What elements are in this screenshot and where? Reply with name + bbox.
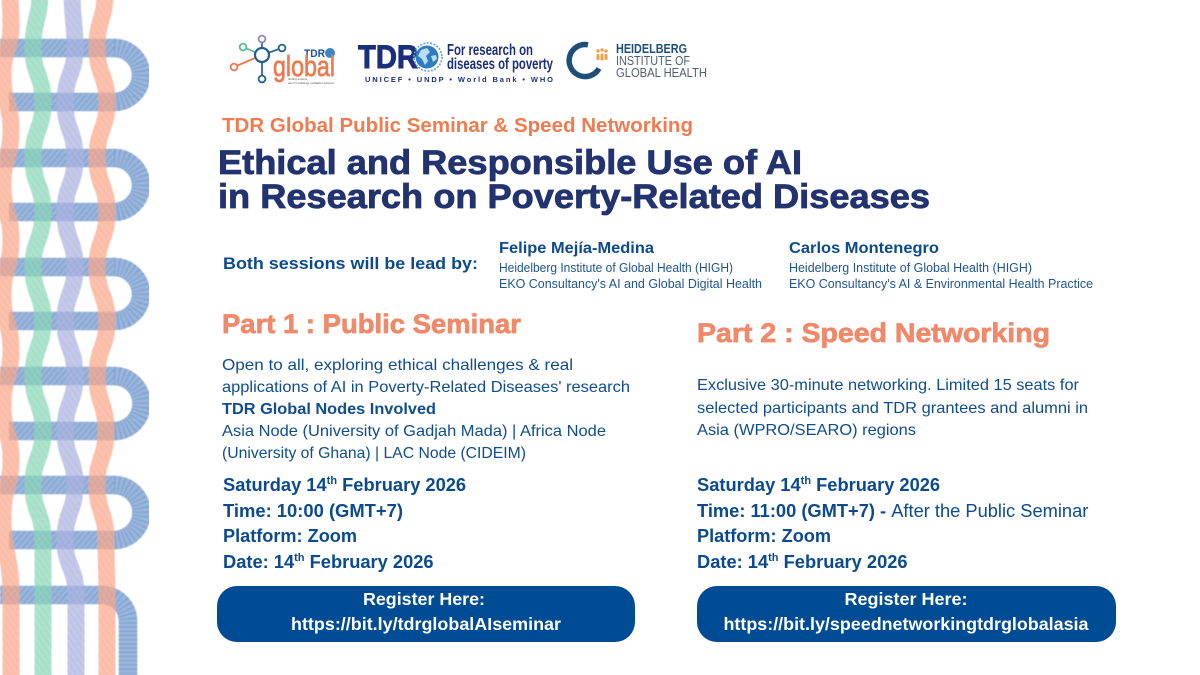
schedule: part 2: February 2026 xyxy=(811,474,940,495)
schedule: part 2: th xyxy=(768,552,779,564)
panel: part 1 public seminar xyxy=(217,309,635,642)
rope: blue loop twist marks xyxy=(102,48,142,675)
rope: green xyxy=(33,0,43,675)
schedule: part 2 xyxy=(697,474,1088,572)
rope: left orange xyxy=(3,0,11,675)
description: part 1: applications of AI in Poverty-Related Diseases' research xyxy=(222,379,630,396)
speaker: Felipe Mejía-Medina: EKO Consultancy's AI and Global Digital Health xyxy=(499,277,762,291)
logo: TDR Global: finding experts xyxy=(288,77,308,81)
description: part 1: Open to all, exploring ethical challenges & real xyxy=(222,357,573,374)
button: register part 1: https://bit.ly/tdrglobalAIseminar xyxy=(291,614,561,634)
logo: Heidelberg Institute of Global Health xyxy=(569,41,707,80)
description: part 1 xyxy=(222,357,630,462)
icon: globe xyxy=(414,43,442,71)
schedule: part 2: Platform: Zoom xyxy=(697,525,831,546)
speaker: Felipe Mejía-Medina xyxy=(499,240,762,291)
logo: TDR for research on diseases of poverty: TDR xyxy=(358,39,418,75)
title xyxy=(218,144,930,216)
speakers intro: Both sessions will be lead by: xyxy=(223,254,478,273)
heading: part 1: Part 1 : Public Seminar xyxy=(222,309,521,339)
description: part 2 xyxy=(697,377,1088,439)
logo: TDR for research on diseases of poverty: For research on xyxy=(447,42,533,59)
schedule: part 1: Time: 10:00 (GMT+7) xyxy=(223,500,403,521)
button: register part 2 xyxy=(697,586,1116,642)
schedule: part 1: February 2026 xyxy=(337,474,466,495)
schedule: part 2: th xyxy=(801,475,811,487)
logo: Heidelberg Institute of Global Health: HEIDELBERG xyxy=(616,41,687,56)
logo: TDR Global xyxy=(231,36,335,85)
title: in Research on Poverty-Related Diseases xyxy=(218,178,930,216)
logo: TDR for research on diseases of poverty xyxy=(358,39,553,84)
button: register part 2: https://bit.ly/speednetworkingtdrglobalasia xyxy=(724,614,1089,634)
schedule: part 2: Time: 11:00 (GMT+7) - After the Public Seminar xyxy=(697,500,1088,521)
panel: part 2 speed networking xyxy=(697,318,1116,642)
heading: part 2: Part 2 : Speed Networking xyxy=(697,318,1050,348)
schedule: part 1: Platform: Zoom xyxy=(223,525,357,546)
speaker: Felipe Mejía-Medina: Felipe Mejía-Medina xyxy=(499,240,654,257)
schedule: part 1: Date: 14 xyxy=(223,551,294,572)
description: part 1: TDR Global Nodes Involved xyxy=(222,401,436,418)
title: Ethical and Responsible Use of AI xyxy=(218,144,802,182)
schedule: part 1: th xyxy=(327,475,337,487)
schedule: part 2: Saturday 14 xyxy=(697,474,801,495)
schedule: part 1: Saturday 14 xyxy=(223,474,327,495)
logo: Heidelberg Institute of Global Health: INSTITUTE OF xyxy=(616,53,690,68)
speaker: Felipe Mejía-Medina: Heidelberg Institute of Global Health (HIGH) xyxy=(499,261,733,275)
speaker: Carlos Montenegro xyxy=(789,240,1093,291)
logo: TDR Global: global xyxy=(273,51,335,83)
logo: TDR Global: and building collaborations xyxy=(288,81,335,85)
speaker: Carlos Montenegro: EKO Consultancy's AI & Environmental Health Practice xyxy=(789,277,1093,291)
logo: TDR for research on diseases of poverty: UNICEF • UNDP • World Bank • WHO xyxy=(365,75,553,84)
schedule: part 1: th xyxy=(294,552,305,564)
subtitle: TDR Global Public Seminar & Speed Networking xyxy=(222,114,693,137)
rope: blue loop turns xyxy=(102,48,142,675)
button: register part 1 xyxy=(217,586,635,642)
schedule: part 2: Date: 14 xyxy=(697,551,768,572)
rope: purple xyxy=(65,0,76,675)
icon: network hub xyxy=(231,36,285,82)
rope: blue horizontal bands xyxy=(0,48,114,595)
schedule: part 1: February 2026 xyxy=(305,551,434,572)
description: part 1: Asia Node (University of Gadjah Mada) | Africa Node xyxy=(222,423,606,440)
woven rope decoration xyxy=(0,0,142,675)
description: part 2: selected participants and TDR grantees and alumni in xyxy=(697,400,1088,417)
description: part 2: Asia (WPRO/SEARO) regions xyxy=(697,422,916,439)
description: part 1: (University of Ghana) | LAC Node (CIDEIM) xyxy=(222,445,526,462)
description: part 2: Exclusive 30-minute networking. Limited 15 seats for xyxy=(697,377,1080,394)
button: register part 1: Register Here: xyxy=(363,589,485,609)
logo: TDR Global: TDR xyxy=(304,48,325,60)
rope: right orange xyxy=(97,0,107,675)
icon: open ring xyxy=(569,45,599,77)
logo: Heidelberg Institute of Global Health: GLOBAL HEALTH xyxy=(616,65,707,80)
speaker: Carlos Montenegro: Carlos Montenegro xyxy=(789,240,939,257)
logo: TDR for research on diseases of poverty: diseases of poverty xyxy=(447,56,553,73)
speaker: Carlos Montenegro: Heidelberg Institute of Global Health (HIGH) xyxy=(789,261,1032,275)
schedule: part 2: February 2026 xyxy=(779,551,908,572)
icon: people dots xyxy=(596,48,608,60)
button: register part 2: Register Here: xyxy=(844,589,968,609)
schedule: part 1 xyxy=(223,474,466,572)
